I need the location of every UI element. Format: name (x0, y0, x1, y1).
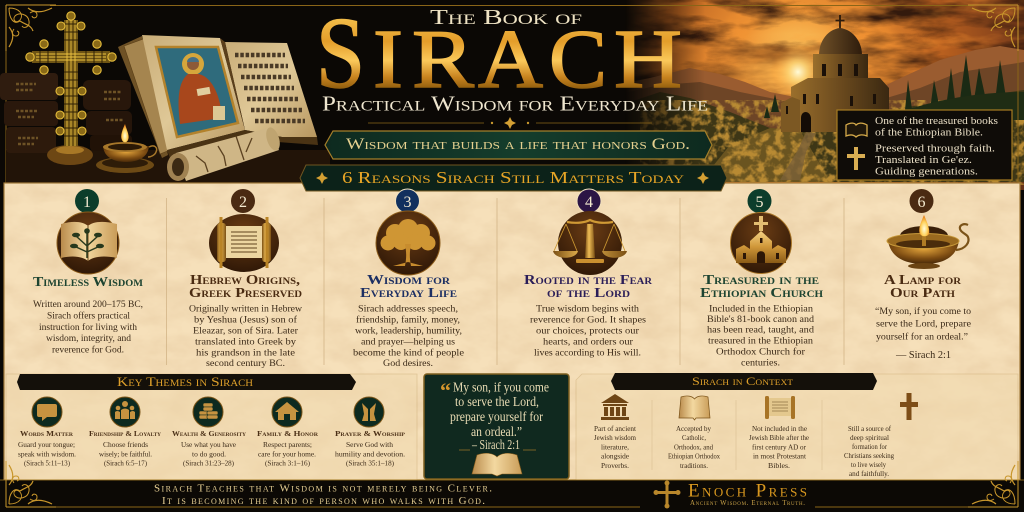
quote: “My son, if you come to (875, 306, 971, 316)
body: Included in the Ethiopian (709, 304, 813, 314)
number badge 5: 5 (756, 194, 764, 211)
reason 4 (524, 189, 653, 358)
context: accepted traditions: Ethiopian Orthodox (668, 452, 720, 460)
number badge 6 (910, 189, 934, 213)
context: accepted traditions (668, 396, 720, 470)
icon page (156, 47, 238, 137)
body: work, leadership, humility, (355, 326, 462, 336)
book stacks (0, 73, 132, 153)
heading: Our Path (890, 285, 955, 300)
title word SIRACH: C (549, 13, 607, 106)
theme: prayer: Serve God with (346, 441, 393, 449)
oil lamp (96, 124, 157, 173)
theme: prayer: Prayer & Worship (335, 429, 405, 438)
body (189, 304, 302, 368)
body: second century BC. (206, 358, 285, 368)
title word SIRACH: I (373, 13, 403, 106)
number badge 2: 2 (239, 194, 247, 211)
icon: press cross (654, 480, 680, 508)
body: his grandson in the late (196, 348, 295, 358)
theme: words matter: Words Matter (20, 429, 73, 438)
ornate corner top right (968, 5, 1018, 51)
still life: books, cross, manuscript, scroll, lamp (0, 12, 330, 183)
header background (0, 0, 1024, 190)
icon: open book (846, 123, 867, 137)
context: Jewish Bible (749, 396, 809, 470)
heading: Greek Preserved (189, 285, 303, 300)
body: has been read, taught, and (707, 324, 814, 334)
body (353, 304, 464, 368)
theme: wealth: Wealth & Generosity (172, 429, 246, 438)
info lines: Guiding generations. (875, 166, 978, 178)
body: wisdom, integrity, and (46, 333, 131, 343)
number badge 5 (748, 189, 772, 213)
heading (189, 272, 303, 300)
body (33, 299, 143, 354)
banner: six reasons: 6 Reasons Sirach Still Matters Today (342, 168, 684, 187)
context: wisdom literature: alongside (601, 452, 629, 460)
number badge 1 (75, 189, 99, 213)
theme: friendship: wisely; be faithful. (99, 450, 152, 458)
icon: golden tree (376, 211, 440, 275)
context: accepted traditions: traditions. (680, 462, 708, 470)
theme: words matter: Guard your tongue; (18, 441, 75, 449)
number badge 3 (396, 189, 420, 213)
body: reverence for God. (52, 344, 124, 354)
panel: scripture quote (424, 374, 569, 479)
themes heading bar: Key Themes in Sirach (117, 374, 254, 389)
body: True wisdom begins with (536, 304, 639, 314)
title word SIRACH: A (478, 13, 543, 106)
body: become the kind of people (353, 348, 464, 358)
title (316, 0, 708, 116)
icon: temple (601, 394, 629, 420)
heading: of the Lord (547, 285, 631, 300)
theme: family (257, 397, 318, 468)
info lines: of the Ethiopian Bible. (875, 126, 983, 138)
heading (524, 272, 653, 300)
title word SIRACH (316, 0, 682, 110)
icon: wooden cross (900, 393, 918, 420)
context: wisdom literature: Part of ancient (594, 425, 636, 433)
ornate corner bottom right (968, 461, 1018, 507)
church (781, 15, 889, 132)
icon: house (272, 397, 302, 427)
context: wisdom literature (594, 394, 636, 470)
parchment (4, 183, 1020, 480)
heading (700, 272, 823, 300)
body: and prayer—helping us (361, 336, 455, 346)
quote: — Sirach 2:1 (895, 350, 951, 361)
title: The Book of (430, 5, 582, 29)
icon: speech bubble (32, 397, 62, 427)
info lines: One of the treasured books (875, 115, 998, 127)
context: Jewish Bible: in most Protestant (753, 452, 806, 460)
icon: open book (472, 453, 522, 476)
heading: Ethiopian Church (700, 285, 823, 300)
theme: prayer: humility and devotion. (335, 450, 405, 458)
context: wisdom literature: Jewish wisdom (594, 434, 636, 442)
icon: Torah scroll (209, 214, 279, 272)
context: accepted traditions: Accepted by (676, 425, 711, 433)
sunset landscape with Ethiopian church (600, 0, 1024, 190)
theme: family: care for your home. (258, 450, 316, 458)
context: spiritual formation (844, 393, 918, 478)
table (6, 150, 330, 183)
manuscript writing (235, 55, 305, 121)
theme: words matter: (Sirach 5:11–13) (24, 460, 71, 468)
theme: words matter: speak with wisdom. (18, 450, 76, 458)
reason 3 (353, 189, 464, 368)
context heading bar (611, 373, 877, 390)
quotation mark: “ (440, 378, 451, 403)
context: wisdom literature: Proverbs. (601, 462, 629, 470)
icon: coins (193, 397, 223, 427)
theme: family: Respect parents; (263, 441, 312, 449)
body: treasured in the Ethiopian (708, 336, 813, 346)
title word SIRACH: R (412, 13, 474, 106)
number badge 4: 4 (585, 194, 593, 211)
heading: Everyday Life (360, 285, 457, 300)
footer message (154, 482, 492, 507)
number badge 1: 1 (83, 194, 91, 211)
body: Sirach addresses speech, (358, 304, 458, 314)
body: God desires. (383, 358, 433, 368)
quote (875, 306, 971, 361)
body: Originally written in Hebrew (189, 304, 302, 314)
ornate corner bottom left (6, 461, 56, 507)
heading: Timeless Wisdom (33, 274, 144, 289)
icon: people (110, 397, 140, 427)
info box: Ethiopian Bible (837, 110, 1012, 180)
parchment scroll (167, 126, 282, 181)
reason 5 (700, 189, 823, 368)
theme: wealth: to do good. (192, 450, 226, 458)
context: spiritual formation: formation for (852, 443, 888, 451)
panel: sirach in context (576, 373, 1018, 480)
title word SIRACH: S (316, 0, 365, 110)
theme: friendship (89, 397, 161, 468)
context: spiritual formation: Still a source of (848, 425, 892, 433)
themes heading bar (17, 374, 356, 390)
icon: church (730, 212, 792, 274)
footer message: Sirach Teaches that Wisdom is not merely being Clever. (154, 482, 492, 494)
ornament divider (368, 117, 652, 129)
body (707, 304, 814, 368)
quote: yourself for an ordeal.” (876, 332, 968, 342)
body: centuries. (741, 358, 780, 368)
icon: scroll (765, 396, 795, 419)
theme: prayer (335, 397, 405, 468)
banner: wisdom (325, 131, 712, 159)
banner: wisdom: Wisdom that builds a life that honors God. (346, 136, 690, 153)
ornate corner top left (6, 5, 56, 51)
panel: key themes (6, 374, 417, 480)
context: spiritual formation: Christians seeking (844, 452, 894, 460)
quote text: prepare yourself for (450, 409, 543, 424)
quote text (450, 380, 549, 452)
theme: wealth: Use what you have (181, 441, 236, 449)
body: reverence for God. It shapes (530, 314, 646, 324)
icon: open book (679, 396, 710, 420)
theme: friendship: (Sirach 6:5–17) (104, 460, 148, 468)
open manuscript book (118, 35, 318, 158)
info lines: Preserved through faith. (875, 142, 995, 154)
info lines: Translated in Ge'ez. (875, 154, 972, 166)
body: Written around 200–175 BC, (33, 299, 143, 309)
context: Jewish Bible: first century AD or (752, 444, 807, 452)
quote text: My son, if you come (453, 380, 549, 394)
icon: gold cross (847, 147, 865, 170)
publisher name: Enoch Press (688, 480, 807, 502)
body (530, 304, 646, 358)
quote text: – Sirach 2:1 (471, 437, 520, 452)
icon: oil lamp (887, 215, 968, 269)
theme: prayer: (Sirach 35:1–18) (346, 460, 395, 468)
number badge 6: 6 (918, 194, 926, 211)
theme: wealth: (Sirach 31:23–28) (183, 460, 235, 468)
body: Eleazar, son of Sira. Later (193, 326, 298, 336)
banner: six reasons (300, 165, 727, 191)
heading (884, 272, 962, 300)
context: spiritual formation: and faithfully. (849, 470, 889, 478)
footer (0, 480, 1024, 512)
context: wisdom literature: literature, (601, 444, 629, 452)
number badge 2 (231, 189, 255, 213)
context: accepted traditions: Catholic, (682, 434, 706, 442)
heading: Hebrew Origins, (190, 272, 300, 287)
body: by Yeshua (Jesus) son of (194, 314, 298, 324)
theme: words matter (18, 397, 76, 468)
footer message: It is becoming the kind of person who walks with God. (162, 495, 485, 507)
title word SIRACH: H (614, 13, 682, 106)
theme: friendship: Choose friends (103, 441, 148, 449)
context: Jewish Bible: Bibles. (768, 462, 790, 470)
number badge 3: 3 (404, 194, 412, 211)
body: hearts, and orders our (543, 336, 633, 346)
heading: Wisdom for (367, 272, 451, 287)
context: Jewish Bible: Jewish Bible after the (749, 434, 809, 442)
theme: friendship: Friendship & Loyalty (89, 429, 161, 438)
quote: serve the Lord, prepare (876, 318, 971, 328)
theme: family: Family & Honor (257, 429, 318, 438)
context: accepted traditions: Orthodox, and (674, 444, 713, 452)
reason 1 (33, 189, 144, 354)
heading: A Lamp for (884, 272, 962, 287)
title: Practical Wisdom for Everyday Life (322, 92, 708, 116)
context: spiritual formation: to live wisely (851, 461, 886, 469)
context: spiritual formation: deep spiritual (850, 434, 889, 442)
body: instruction for living with (39, 322, 137, 332)
heading: Treasured in the (703, 272, 819, 287)
gold frame lines (6, 6, 1018, 183)
quote text: to serve the Lord, (455, 394, 539, 409)
theme: wealth (172, 397, 246, 468)
body: Sirach offers practical (47, 310, 130, 320)
ornate Ethiopian cross (26, 12, 116, 165)
reason 6 (875, 189, 971, 361)
body: translated into Greek by (195, 336, 296, 346)
column dividers (166, 198, 844, 365)
body: Orthodox Church for (716, 346, 805, 356)
icon: book with tree (57, 212, 119, 274)
body: friendship, family, money, (356, 314, 460, 324)
icon: scales (553, 211, 627, 275)
body: lives according to His will. (534, 348, 641, 358)
heading: Rooted in the Fear (524, 272, 653, 287)
heading (360, 272, 457, 300)
publisher tagline: Ancient Wisdom. Eternal Truth. (690, 500, 805, 507)
info lines (875, 115, 998, 178)
icon: praying hands (354, 397, 384, 427)
context heading bar: Sirach in Context (692, 374, 793, 388)
body: our choices, protects our (536, 326, 639, 336)
context: Jewish Bible: Not included in the (752, 425, 807, 433)
theme: family: (Sirach 3:1–16) (265, 460, 311, 468)
body: Bible's 81-book canon and (707, 314, 814, 324)
quote text: an ordeal.” (471, 424, 522, 439)
reason 2 (189, 189, 303, 368)
number badge 4 (577, 189, 601, 213)
